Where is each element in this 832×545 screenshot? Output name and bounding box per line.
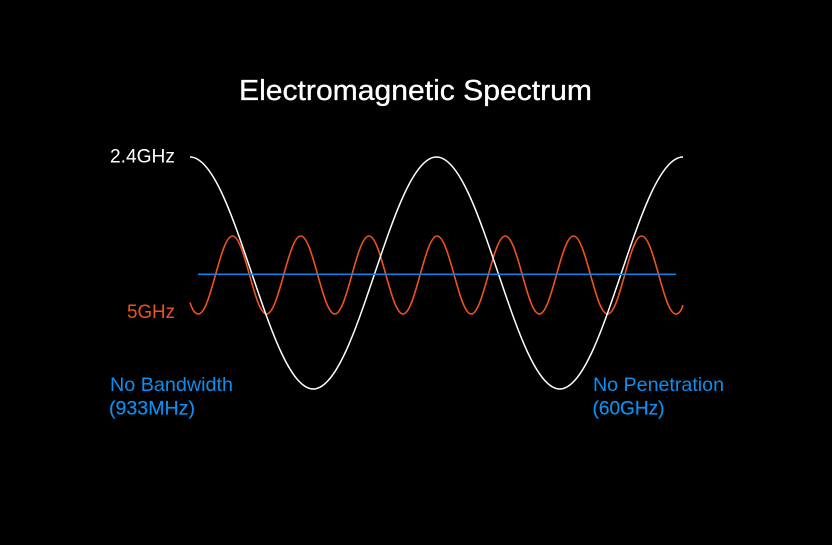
label: 2.4GHz: 2.4GHz: [110, 146, 175, 168]
label: 5GHz: 5GHz: [127, 302, 175, 323]
label: no bandwidth: [109, 374, 233, 420]
label: no penetration: [592, 374, 724, 420]
label: no penetration: (60GHz): [592, 398, 664, 420]
blue flat line: [198, 273, 676, 275]
label: no bandwidth: No Bandwidth: [110, 374, 233, 396]
label: no bandwidth: (933MHz): [109, 398, 195, 420]
5GHz orange wave: [190, 236, 683, 314]
2.4GHz white wave: [190, 157, 683, 389]
title: Electromagnetic Spectrum: [239, 75, 592, 107]
label: no penetration: No Penetration: [593, 374, 724, 396]
